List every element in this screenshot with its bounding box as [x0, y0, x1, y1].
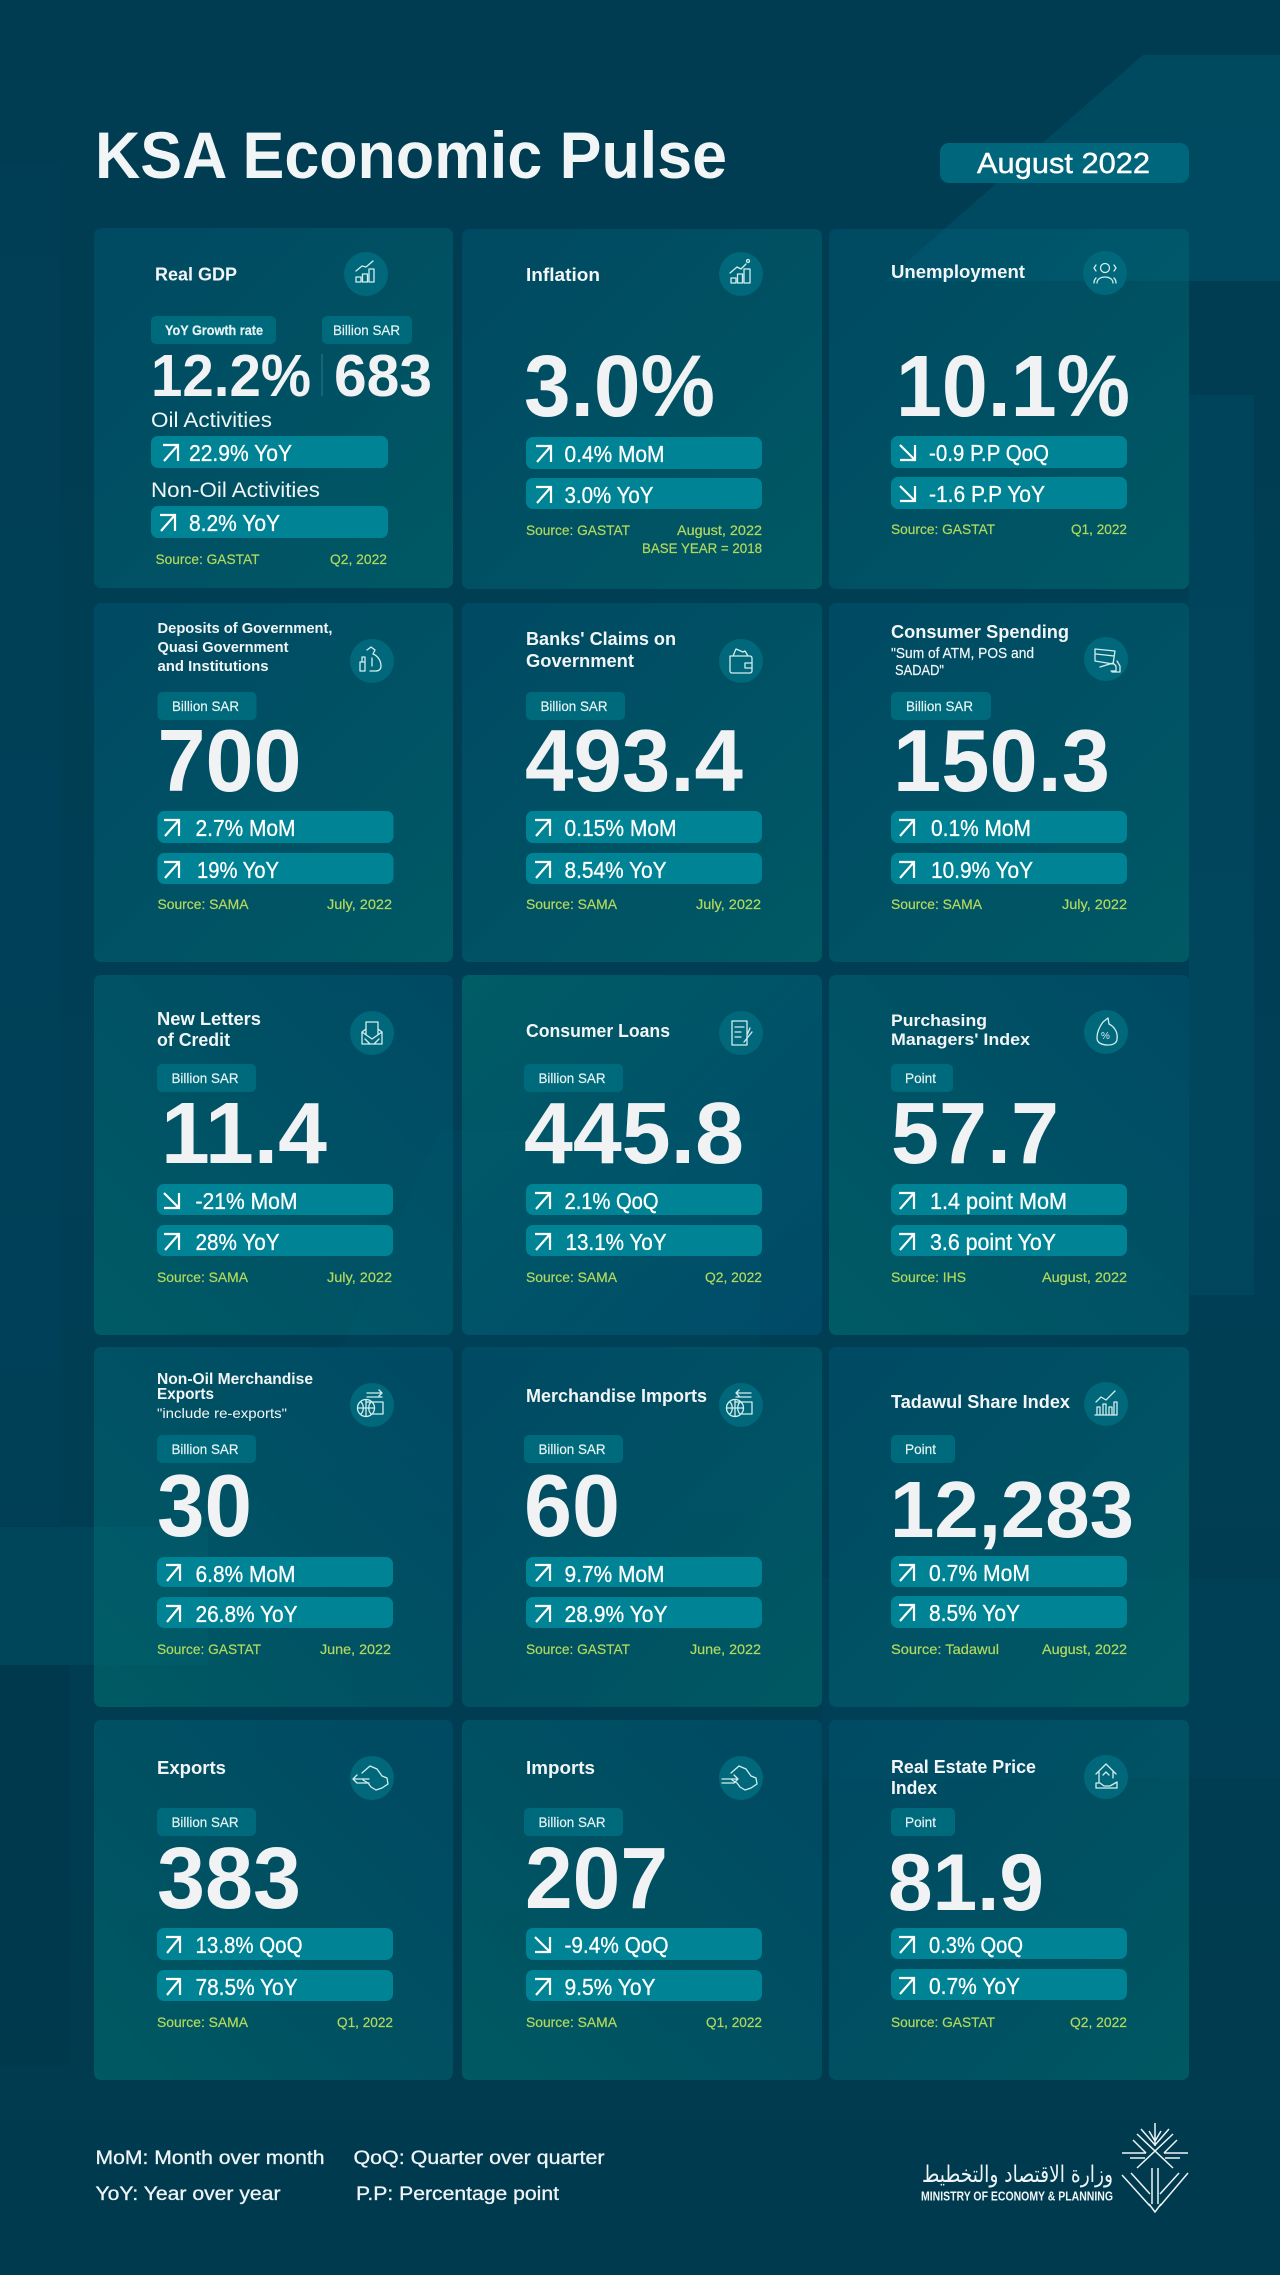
label: oil activities: Oil Activities [151, 409, 272, 432]
unit [891, 692, 991, 720]
source: Source: SAMA [891, 896, 983, 912]
value: 30 [157, 1456, 252, 1555]
change: oil [151, 436, 388, 468]
unit label: growth rate [151, 316, 276, 344]
source [891, 896, 1127, 912]
source [891, 1269, 1127, 1285]
panel: Consumer Spending [829, 603, 1189, 962]
unit: Point [905, 1814, 936, 1830]
change: QoQ [157, 1928, 393, 1960]
source [891, 2014, 1127, 2030]
icon: signed document [719, 1011, 763, 1055]
heading: Real GDP [155, 264, 237, 284]
source: July, 2022 [1062, 896, 1127, 912]
value: 700 [158, 711, 302, 810]
label: non-oil activities: Non-Oil Activities [151, 479, 320, 502]
unit: Billion SAR [172, 1814, 238, 1830]
change: YoY: 3.0% YoY [564, 482, 654, 508]
change: YoY [157, 1225, 393, 1256]
change: MoM [526, 1557, 762, 1587]
icon: percent bag [1084, 1010, 1128, 1054]
change: MoM: 9.7% MoM [564, 1561, 664, 1587]
change: YoY: 8.5% YoY [929, 1600, 1020, 1626]
source [526, 1641, 761, 1657]
legend: MoM: Month over month [96, 2148, 324, 2169]
source: August, 2022 [677, 522, 762, 538]
source: Source: SAMA [526, 896, 618, 912]
change: MoM [157, 1184, 393, 1215]
heading: Consumer Spending [891, 622, 1069, 642]
source [891, 521, 1127, 537]
heading: Managers' Index [891, 1030, 1031, 1049]
unit: Billion SAR [538, 1441, 606, 1457]
change: YoY [157, 1970, 393, 2001]
change: non-oil [151, 506, 388, 538]
icon: emblem [1122, 2123, 1188, 2212]
change: YoY [157, 1597, 393, 1628]
heading: New Letters [157, 1009, 261, 1029]
change: YoY [526, 1970, 762, 2001]
source: Q2, 2022 [1070, 2014, 1127, 2030]
panel: Inflation [462, 229, 822, 589]
unit: Billion SAR [538, 1070, 606, 1086]
change: non-oil: 8.2% YoY [189, 510, 280, 536]
unit: Billion SAR [172, 1070, 238, 1086]
change: MoM [526, 811, 762, 843]
source: Source: GASTAT [526, 1641, 630, 1657]
change: QoQ [891, 436, 1127, 468]
change: MoM [157, 1557, 393, 1587]
heading: SADAD" [895, 663, 944, 679]
heading: Unemployment [891, 262, 1025, 282]
heading: Deposits of Government, [158, 620, 332, 637]
change: MoM [158, 811, 394, 843]
value: 3.0% [524, 338, 715, 435]
heading [157, 1371, 313, 1421]
icon: rising chart [719, 252, 763, 296]
change: MoM: 6.8% MoM [196, 1561, 296, 1587]
source: Q1, 2022 [706, 2014, 762, 2030]
heading: Exports [157, 1758, 226, 1778]
unit [891, 1435, 955, 1463]
icon: stock chart [1084, 1382, 1128, 1426]
source [526, 896, 761, 912]
change: YoY [891, 477, 1127, 509]
icon: globe and box, export arrow [350, 1383, 394, 1427]
heading: Inflation [526, 265, 600, 285]
source [156, 551, 387, 567]
source: August, 2022 [1042, 1269, 1127, 1285]
value: 207 [525, 1830, 668, 1927]
panel: Real GDP [94, 228, 453, 588]
source: Source: Tadawul [891, 1641, 999, 1657]
source: Source: GASTAT [891, 521, 995, 537]
unit [524, 1808, 623, 1836]
heading: Banks' Claims on [526, 629, 676, 649]
change: QoQ: 0.3% QoQ [929, 1932, 1023, 1958]
unit [524, 1435, 623, 1463]
heading: Real Estate Price [891, 1757, 1036, 1777]
source [157, 1269, 392, 1285]
change: MoM: 0.15% MoM [564, 815, 676, 841]
source [891, 1641, 1127, 1657]
source: Source: GASTAT [891, 2014, 995, 2030]
panel: Unemployment [829, 229, 1189, 589]
heading: Imports [526, 1758, 595, 1778]
icon: house in hand [1084, 1755, 1128, 1799]
source: August, 2022 [1042, 1641, 1127, 1657]
unit label: billion SAR [322, 316, 412, 344]
unit [158, 692, 256, 720]
source [157, 1641, 391, 1657]
unit [526, 692, 625, 720]
change: YoY: 13.1% YoY [566, 1229, 666, 1255]
value: 150.3 [893, 711, 1110, 810]
unit: Point [905, 1441, 936, 1457]
change: YoY [891, 1969, 1127, 2000]
heading: of Credit [157, 1030, 230, 1050]
heading: "include re-exports" [157, 1405, 287, 1421]
title: KSA Economic Pulse [95, 118, 727, 192]
value: 383 [157, 1830, 301, 1927]
icon: map with outgoing arrow [350, 1756, 394, 1800]
unit [524, 1064, 623, 1092]
heading: Purchasing [891, 1011, 987, 1030]
value: 81.9 [888, 1838, 1044, 1928]
legend: P.P: Percentage point [356, 2184, 560, 2205]
icon: bar chart [344, 252, 388, 296]
source: Source: SAMA [526, 2014, 618, 2030]
change: YoY: 28.9% YoY [564, 1601, 668, 1627]
change: MoM: 0.1% MoM [931, 815, 1031, 841]
change: MoM [891, 811, 1127, 843]
value: 60 [524, 1456, 620, 1555]
legend [96, 2148, 605, 2205]
legend: QoQ: Quarter over quarter [354, 2148, 605, 2169]
change: QoQ [526, 1184, 762, 1215]
source [526, 2014, 762, 2030]
heading: Non-Oil Merchandise [157, 1371, 313, 1388]
change: YoY: 78.5% YoY [196, 1974, 298, 2000]
change: YoY [891, 853, 1127, 884]
source: Source: GASTAT [156, 551, 260, 567]
panel: Banks' Claims on Government [462, 603, 822, 962]
source: Source: SAMA [157, 2014, 249, 2030]
date badge [940, 143, 1189, 183]
source: July, 2022 [327, 896, 392, 912]
source: June, 2022 [690, 1641, 761, 1657]
change: MoM [526, 437, 762, 469]
unit [157, 1435, 256, 1463]
source: Q1, 2022 [1071, 521, 1127, 537]
value: billion SAR: 683 [334, 343, 432, 409]
heading: Consumer Loans [526, 1021, 670, 1041]
source: July, 2022 [696, 896, 761, 912]
panel: Non-Oil Merchandise Exports [94, 1347, 453, 1707]
heading [891, 622, 1069, 679]
panel: Tadawul Share Index [829, 1347, 1189, 1707]
icon: cards in hand [1084, 637, 1128, 681]
change: QoQ: -0.9 P.P QoQ [929, 440, 1049, 466]
change: QoQ: 2.1% QoQ [564, 1188, 658, 1214]
source: July, 2022 [327, 1269, 392, 1285]
source: Source: SAMA [157, 1269, 249, 1285]
source [526, 522, 762, 556]
legend: YoY: Year over year [96, 2184, 281, 2205]
heading: Exports [157, 1386, 214, 1403]
logo: Ministry of Economy and Planning: MINISTRY OF ECONOMY & PLANNING [921, 2188, 1113, 2204]
change: YoY [891, 1225, 1127, 1256]
logo: Ministry of Economy and Planning: وزارة الاقتصاد والتخطيط [922, 2162, 1113, 2188]
change: MoM: 1.4 point MoM [930, 1188, 1067, 1214]
source: Source: SAMA [526, 1269, 618, 1285]
change: YoY: 9.5% YoY [564, 1974, 656, 2000]
value: 11.4 [161, 1085, 327, 1182]
change: YoY: 0.7% YoY [929, 1973, 1020, 1999]
source: Source: SAMA [158, 896, 249, 912]
icon: wallet [719, 639, 763, 683]
heading: Tadawul Share Index [891, 1392, 1070, 1412]
value: 12,283 [890, 1465, 1134, 1554]
unit: Billion SAR [906, 698, 973, 714]
source: June, 2022 [320, 1641, 391, 1657]
unit: Billion SAR [172, 698, 239, 714]
panel: Deposits of Government [94, 603, 453, 962]
date badge: August 2022 [977, 148, 1150, 180]
change: YoY: 8.54% YoY [564, 857, 666, 883]
unit [157, 1064, 256, 1092]
source: BASE YEAR = 2018 [642, 540, 762, 556]
source [158, 896, 392, 912]
unit: Billion SAR [538, 1814, 606, 1830]
heading: Quasi Government [158, 639, 289, 656]
panel: Exports [94, 1720, 453, 2080]
value: growth rate: 12.2% [151, 343, 311, 409]
source: Q1, 2022 [337, 2014, 393, 2030]
unit: Billion SAR [540, 698, 608, 714]
unit [891, 1064, 953, 1092]
panel: Imports [462, 1720, 822, 2080]
value: 10.1% [896, 338, 1130, 435]
icon: map with incoming arrow [719, 1756, 763, 1800]
source: Q2, 2022 [330, 551, 387, 567]
change: MoM [891, 1556, 1127, 1587]
panel: Purchasing Managers' Index [829, 975, 1189, 1335]
source: Source: GASTAT [526, 522, 630, 538]
panel: Consumer Loans [462, 975, 822, 1335]
change: YoY: -1.6 P.P YoY [929, 481, 1045, 507]
change: YoY [526, 478, 762, 509]
heading: "Sum of ATM, POS and [891, 646, 1034, 662]
change: YoY [891, 1596, 1127, 1628]
change: MoM: 0.4% MoM [564, 441, 664, 467]
heading: Index [891, 1778, 937, 1798]
change: QoQ [526, 1928, 762, 1960]
change: QoQ: -9.4% QoQ [564, 1932, 668, 1958]
change: QoQ [891, 1928, 1127, 1959]
panel: Real Estate Price Index [829, 1720, 1189, 2080]
icon: envelope [350, 1011, 394, 1055]
unit label: billion SAR: Billion SAR [333, 322, 400, 338]
icon: money bag [350, 639, 394, 683]
heading: and Institutions [158, 658, 268, 675]
change: YoY [526, 853, 762, 884]
change: MoM: 2.7% MoM [196, 815, 296, 841]
change: MoM [891, 1184, 1127, 1215]
icon: percent bag: % [1101, 1031, 1110, 1042]
heading: Merchandise Imports [526, 1386, 707, 1406]
source [526, 1269, 762, 1285]
unit [157, 1808, 256, 1836]
change: QoQ: 13.8% QoQ [196, 1932, 302, 1958]
panel: New Letters of Credit [94, 975, 453, 1335]
source: Q2, 2022 [705, 1269, 762, 1285]
panel: Merchandise Imports [462, 1347, 822, 1707]
value: 445.8 [524, 1085, 744, 1182]
value: 57.7 [891, 1085, 1059, 1182]
change: YoY [526, 1225, 762, 1256]
change: YoY: 26.8% YoY [196, 1601, 298, 1627]
unit [891, 1808, 955, 1836]
source: Source: GASTAT [157, 1641, 261, 1657]
source: Source: IHS [891, 1269, 966, 1285]
change: YoY: 10.9% YoY [931, 857, 1033, 883]
value: 493.4 [525, 711, 743, 810]
change: oil: 22.9% YoY [189, 440, 292, 466]
icon: people [1083, 251, 1127, 295]
unit: Billion SAR [172, 1441, 238, 1457]
change: YoY: 28% YoY [196, 1229, 280, 1255]
change: MoM: -21% MoM [196, 1188, 298, 1214]
logo: Ministry of Economy and Planning [921, 2123, 1188, 2212]
change: YoY [526, 1597, 762, 1628]
source [157, 2014, 393, 2030]
heading: Government [526, 651, 634, 671]
icon: globe and box, import arrow [719, 1383, 763, 1427]
change: MoM: 0.7% MoM [929, 1560, 1030, 1586]
change: YoY [158, 853, 394, 884]
change: YoY: 3.6 point YoY [930, 1229, 1056, 1255]
unit: Point [905, 1070, 936, 1086]
unit label: growth rate: YoY Growth rate [165, 322, 263, 338]
change: YoY: 19% YoY [197, 857, 279, 883]
